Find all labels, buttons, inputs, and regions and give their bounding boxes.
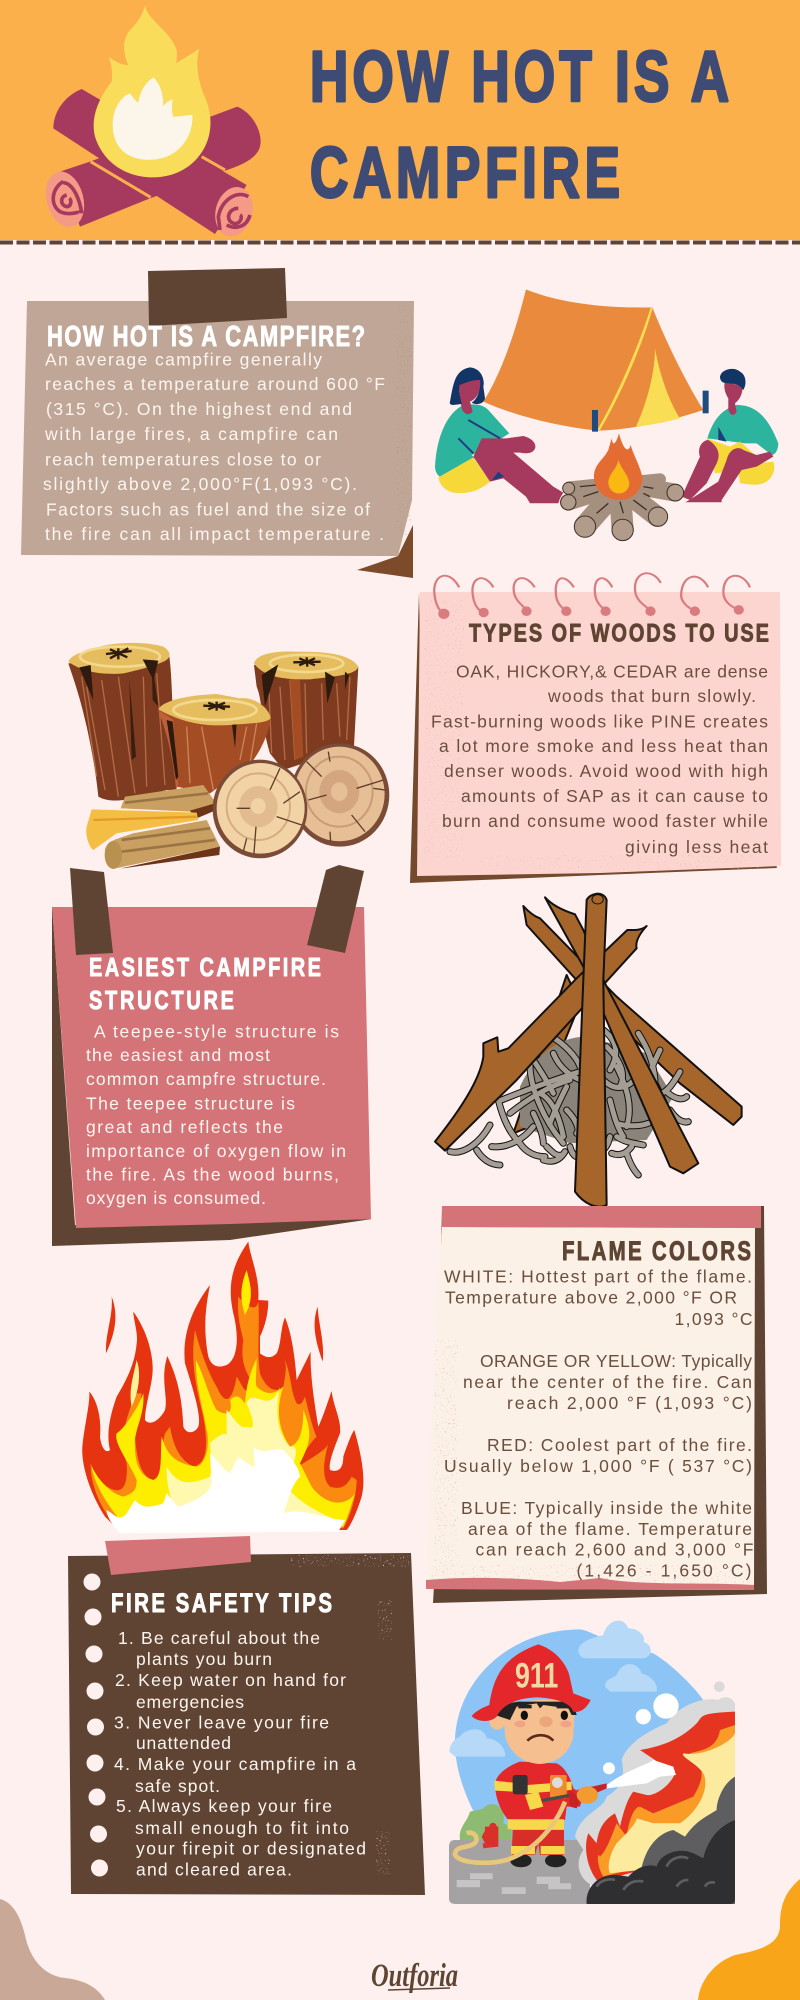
tips list: plants you burn	[136, 1649, 272, 1669]
text block: near the center of the fire. Can	[463, 1372, 752, 1392]
text block: amounts of SAP as it can cause to	[461, 786, 768, 806]
illustration: teepee fire structure	[435, 894, 742, 1207]
heading: FIRE SAFETY TIPS	[111, 1588, 332, 1619]
text block: denser woods. Avoid wood with high	[444, 761, 768, 781]
logo: Outforia: Outforia	[371, 1958, 458, 1994]
text block: RED: Coolest part of the fire.	[487, 1435, 752, 1455]
text block: oxygen is consumed.	[86, 1188, 266, 1208]
text block: area of the flame. Temperature	[468, 1519, 752, 1539]
tips list: small enough to fit into	[135, 1818, 349, 1838]
illustration: tent with two campers and fire	[435, 289, 778, 541]
heading: FLAME COLORS	[562, 1236, 751, 1267]
back right stump	[254, 651, 358, 770]
text block: BLUE: Typically inside the white	[461, 1498, 752, 1518]
panel: fire safety tips	[68, 1536, 425, 1895]
decorative blob: bottom right	[698, 1879, 800, 2000]
split firewood	[86, 785, 220, 869]
heading: EASIEST CAMPFIRE	[89, 952, 321, 982]
panel: flame colors	[426, 1206, 767, 1603]
text block: Temperature above 2,000 °F OR	[445, 1288, 737, 1308]
illustration: large flame	[82, 1242, 363, 1533]
text block: reaches a temperature around 600 °F	[45, 374, 385, 394]
icon: right camper	[682, 369, 778, 502]
text block	[431, 662, 768, 857]
text block: OAK, HICKORY,& CEDAR are dense	[456, 662, 768, 682]
text block: a lot more smoke and less heat than	[439, 736, 768, 756]
text block	[86, 1022, 346, 1208]
icon: small campfire	[561, 433, 684, 541]
text block: A teepee-style structure is	[94, 1022, 339, 1042]
text block: WHITE: Hottest part of the flame.	[444, 1266, 752, 1286]
icon: tent	[483, 289, 709, 432]
tips list: safe spot.	[135, 1776, 220, 1796]
tips list: 2. Keep water on hand for	[115, 1670, 346, 1690]
header band	[0, 0, 800, 242]
right wood slice	[291, 743, 389, 847]
heading	[89, 952, 321, 1015]
bush	[460, 1804, 512, 1843]
text block: The teepee structure is	[86, 1094, 295, 1114]
heading: TYPES OF WOODS TO USE	[469, 619, 769, 647]
tips list: and cleared area.	[136, 1860, 292, 1880]
text block: Factors such as fuel and the size of	[46, 500, 370, 520]
text block: An average campfire generally	[45, 350, 322, 370]
back left stump	[68, 643, 177, 801]
text block: importance of oxygen flow in	[86, 1141, 346, 1161]
text block: reach temperatures close to or	[45, 450, 321, 470]
hydrant	[482, 1823, 498, 1848]
text block: giving less heat	[625, 837, 768, 857]
text block	[43, 350, 385, 544]
text block: burn and consume wood faster while	[442, 811, 768, 831]
illustration: firefighter spraying fire	[449, 1621, 735, 1904]
tips list: 3. Never leave your fire	[114, 1712, 329, 1732]
helmet number: 911	[515, 1656, 558, 1695]
icon: firefighter	[455, 1644, 607, 1867]
text block: the fire can all impact temperature .	[45, 524, 384, 544]
panel: how hot is a campfire	[21, 268, 414, 578]
text block	[444, 1266, 754, 1580]
centre stump	[158, 694, 271, 793]
tips list: unattended	[136, 1733, 231, 1753]
water spray	[607, 1760, 676, 1788]
text block: (315 °C). On the highest end and	[46, 399, 352, 419]
binder holes	[84, 1574, 108, 1876]
tips list: 1. Be careful about the	[118, 1628, 320, 1648]
text block: ORANGE OR YELLOW: Typically	[480, 1351, 752, 1371]
title: CAMPFIRE	[310, 133, 620, 213]
text block: Usually below 1,000 °F ( 537 °C)	[444, 1456, 752, 1476]
tape	[105, 1536, 251, 1575]
title	[310, 37, 729, 213]
text block: with large fires, a campfire can	[44, 424, 338, 444]
tips list: emergencies	[136, 1692, 244, 1712]
left wood slice	[213, 760, 307, 858]
panel: types of woods to use	[410, 573, 781, 883]
text block: 1,093 °C	[674, 1309, 752, 1329]
text block: the fire. As the wood burns,	[86, 1164, 339, 1184]
heading: HOW HOT IS A CAMPFIRE?	[47, 321, 365, 353]
text block: (1,426 - 1,650 °C)	[576, 1560, 752, 1580]
tips list: your firepit or designated	[136, 1838, 366, 1858]
notebook rings	[434, 573, 750, 619]
text block: woods that burn slowly.	[547, 686, 756, 706]
title: HOW HOT IS A	[310, 37, 729, 117]
text block: common campfre structure.	[86, 1069, 326, 1089]
tips list: 4. Make your campfire in a	[114, 1754, 356, 1774]
decorative blob: bottom left	[0, 1899, 105, 2000]
tips list: 5. Always keep your fire	[116, 1796, 332, 1816]
text block: can reach 2,600 and 3,000 °F	[476, 1540, 754, 1560]
icon: left camper	[435, 367, 563, 503]
panel: easiest campfire structure	[52, 865, 372, 1246]
tips list	[114, 1628, 366, 1880]
text block: the easiest and most	[86, 1045, 270, 1065]
illustration: wood logs and slices	[68, 643, 389, 869]
sky and clouds	[449, 1621, 735, 1863]
smoke and fire	[575, 1681, 735, 1904]
text block: reach 2,000 °F (1,093 °C)	[507, 1393, 752, 1413]
heading: STRUCTURE	[89, 985, 234, 1015]
icon: campfire logo	[40, 5, 261, 241]
text block: slightly above 2,000°F(1,093 °C).	[43, 474, 357, 494]
text block: Fast-burning woods like PINE creates	[431, 712, 768, 732]
ground	[449, 1840, 590, 1904]
text block: great and reflects the	[86, 1117, 283, 1137]
